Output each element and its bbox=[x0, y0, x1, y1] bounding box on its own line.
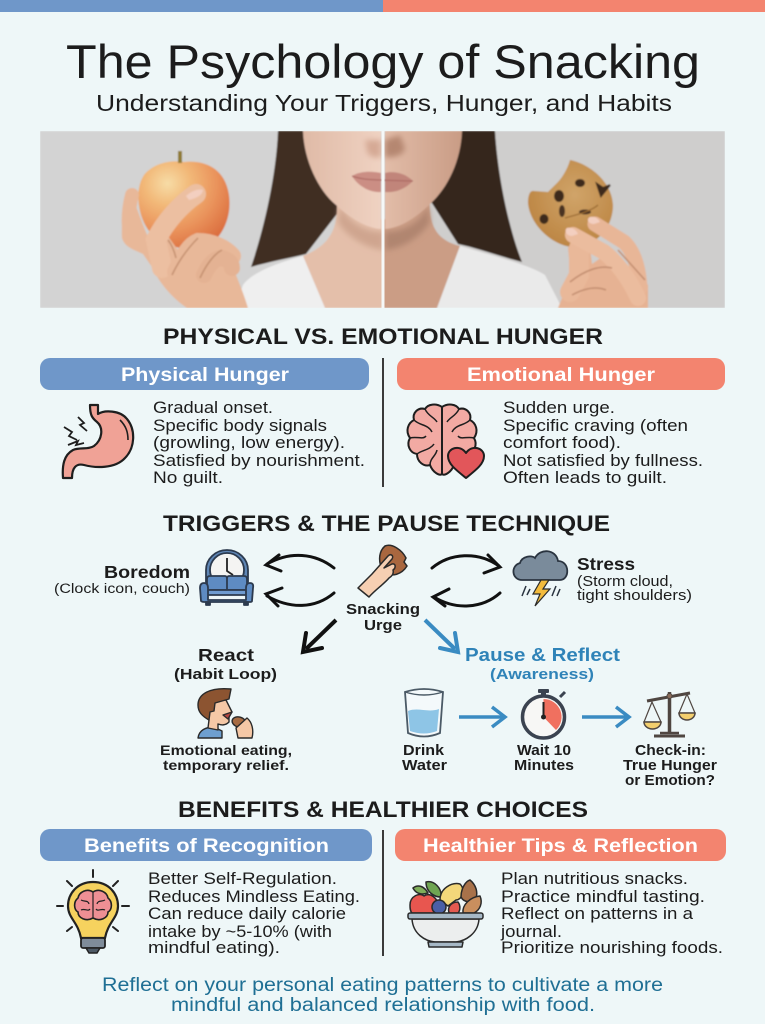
text: emotional hunger traits: comfort food). bbox=[503, 434, 621, 452]
footer reflection message: Reflect on your personal eating patterns to cultivate a more bbox=[102, 975, 663, 996]
label: snacking urge: Snacking bbox=[346, 601, 420, 618]
icon: brain with heart bbox=[407, 405, 484, 478]
pill: benefits of recognition: Benefits of Recognition bbox=[84, 835, 329, 857]
arrow: wait to check-in bbox=[582, 707, 629, 727]
text: benefits list: intake by ~5-10% (with bbox=[148, 923, 332, 941]
label: pause and reflect: (Awareness) bbox=[490, 666, 594, 683]
arrow: urge to boredom (upper) bbox=[266, 555, 334, 571]
caption: drink water bbox=[402, 742, 447, 774]
icon: balance scale bbox=[644, 692, 695, 736]
text: benefits list bbox=[148, 870, 360, 957]
label: boredom bbox=[54, 562, 190, 596]
label: react habit loop: (Habit Loop) bbox=[174, 666, 277, 683]
icon: water glass bbox=[405, 689, 443, 736]
text: physical hunger traits: Specific body signals bbox=[153, 417, 327, 435]
label: boredom: Boredom bbox=[104, 562, 190, 582]
text: tips list: Reflect on patterns in a bbox=[501, 905, 694, 923]
nose shading bbox=[365, 140, 381, 157]
caption: wait 10 minutes bbox=[514, 742, 574, 774]
label: react habit loop: React bbox=[198, 645, 254, 665]
icon: hand holding cookie bbox=[358, 545, 407, 597]
arrow: urge to stress (upper) bbox=[432, 555, 500, 573]
caption: emotional eating: Emotional eating, bbox=[160, 742, 292, 758]
text: tips list bbox=[500, 870, 723, 957]
caption: emotional eating: temporary relief. bbox=[163, 757, 289, 773]
icon: clock and couch bbox=[200, 550, 253, 605]
text: emotional hunger traits bbox=[503, 399, 703, 487]
label: pause and reflect bbox=[465, 644, 620, 683]
panel: physical hunger bbox=[40, 358, 369, 487]
footer reflection message bbox=[102, 975, 663, 1016]
icon: storm cloud bbox=[513, 551, 567, 606]
text: emotional hunger traits: Specific craving (often bbox=[503, 417, 688, 435]
caption: wait 10 minutes: Minutes bbox=[514, 757, 574, 774]
text: benefits list: Can reduce daily calorie bbox=[148, 905, 346, 923]
caption: wait 10 minutes: Wait 10 bbox=[517, 742, 571, 759]
arrow: boredom to urge (lower) bbox=[266, 588, 334, 606]
label: snacking urge bbox=[346, 601, 420, 634]
panel: healthier tips bbox=[395, 829, 726, 957]
text: tips list: Plan nutritious snacks. bbox=[501, 870, 688, 888]
icon: light bulb with brain bbox=[57, 870, 129, 953]
text: tips list: journal. bbox=[500, 923, 562, 941]
caption: check-in bbox=[623, 742, 717, 789]
section heading: physical vs emotional: PHYSICAL VS. EMOTIONAL HUNGER bbox=[163, 324, 603, 349]
label: stress: Stress bbox=[577, 554, 635, 574]
icon: stopwatch bbox=[522, 689, 565, 738]
text: physical hunger traits: (growling, low energy). bbox=[153, 434, 345, 452]
top colour bar bbox=[0, 0, 765, 12]
caption: emotional eating bbox=[160, 742, 292, 773]
text: physical hunger traits: Gradual onset. bbox=[153, 399, 273, 417]
caption: check-in: Check-in: bbox=[635, 742, 706, 759]
shirt bbox=[235, 256, 325, 308]
section heading: triggers and pause: TRIGGERS & THE PAUSE TECHNIQUE bbox=[163, 511, 610, 536]
footer reflection message: mindful and balanced relationship with food. bbox=[171, 995, 595, 1016]
title: The Psychology of Snacking bbox=[66, 35, 700, 88]
label: stress: (Storm cloud, bbox=[577, 574, 673, 590]
text: benefits list: mindful eating). bbox=[148, 939, 280, 957]
apple bbox=[138, 161, 230, 249]
panel: benefits of recognition bbox=[40, 829, 372, 957]
text: physical hunger traits bbox=[153, 399, 365, 487]
text: benefits list: Reduces Mindless Eating. bbox=[148, 888, 360, 906]
left hand bbox=[121, 208, 248, 308]
text: emotional hunger traits: Not satisfied by fullness. bbox=[503, 452, 703, 470]
text: physical hunger traits: Satisfied by nourishment. bbox=[153, 452, 365, 470]
label: react habit loop bbox=[174, 645, 277, 683]
label: pause and reflect: Pause & Reflect bbox=[465, 644, 620, 665]
text: tips list: Prioritize nourishing foods. bbox=[501, 939, 723, 957]
caption: check-in: True Hunger bbox=[623, 757, 717, 774]
text: tips list: Practice mindful tasting. bbox=[501, 888, 705, 906]
pill: emotional hunger: Emotional Hunger bbox=[467, 364, 655, 386]
section heading: benefits and choices: BENEFITS & HEALTHIER CHOICES bbox=[178, 797, 588, 822]
caption: drink water: Drink bbox=[403, 742, 445, 759]
pill: benefits of recognition bbox=[40, 829, 372, 861]
pill: healthier tips bbox=[395, 829, 726, 861]
panel: emotional hunger bbox=[397, 358, 725, 487]
label: stress: tight shoulders) bbox=[577, 588, 692, 604]
pill: emotional hunger bbox=[397, 358, 725, 390]
pill: physical hunger bbox=[40, 358, 369, 390]
icon: stomach bbox=[63, 405, 133, 478]
label: snacking urge: Urge bbox=[364, 617, 402, 634]
neck bbox=[303, 206, 382, 308]
arrow: urge to pause bbox=[425, 620, 458, 652]
hair bbox=[251, 131, 340, 267]
arrow: stress to urge (lower) bbox=[433, 589, 500, 606]
icon: man eating bbox=[198, 689, 253, 738]
label: stress bbox=[577, 554, 692, 604]
icon: fruit and nut bowl bbox=[408, 880, 483, 947]
cookie bbox=[528, 160, 613, 247]
label: boredom: (Clock icon, couch) bbox=[54, 581, 190, 596]
hero photo: apple vs cookie split portrait bbox=[40, 131, 725, 308]
text: benefits list: Better Self-Regulation. bbox=[148, 870, 337, 888]
caption: check-in: or Emotion? bbox=[625, 772, 715, 789]
pill: healthier tips: Healthier Tips & Reflection bbox=[423, 835, 698, 857]
right hand bbox=[558, 247, 648, 308]
face bbox=[303, 131, 381, 229]
text: emotional hunger traits: Sudden urge. bbox=[503, 399, 615, 417]
text: emotional hunger traits: Often leads to guilt. bbox=[503, 469, 667, 487]
text: physical hunger traits: No guilt. bbox=[153, 469, 223, 487]
pill: physical hunger: Physical Hunger bbox=[121, 364, 289, 386]
caption: drink water: Water bbox=[402, 757, 447, 774]
subtitle: Understanding Your Triggers, Hunger, and Habits bbox=[96, 90, 672, 116]
arrow: urge to react bbox=[303, 620, 336, 652]
lips bbox=[352, 172, 381, 192]
arrow: water to wait bbox=[459, 707, 505, 727]
